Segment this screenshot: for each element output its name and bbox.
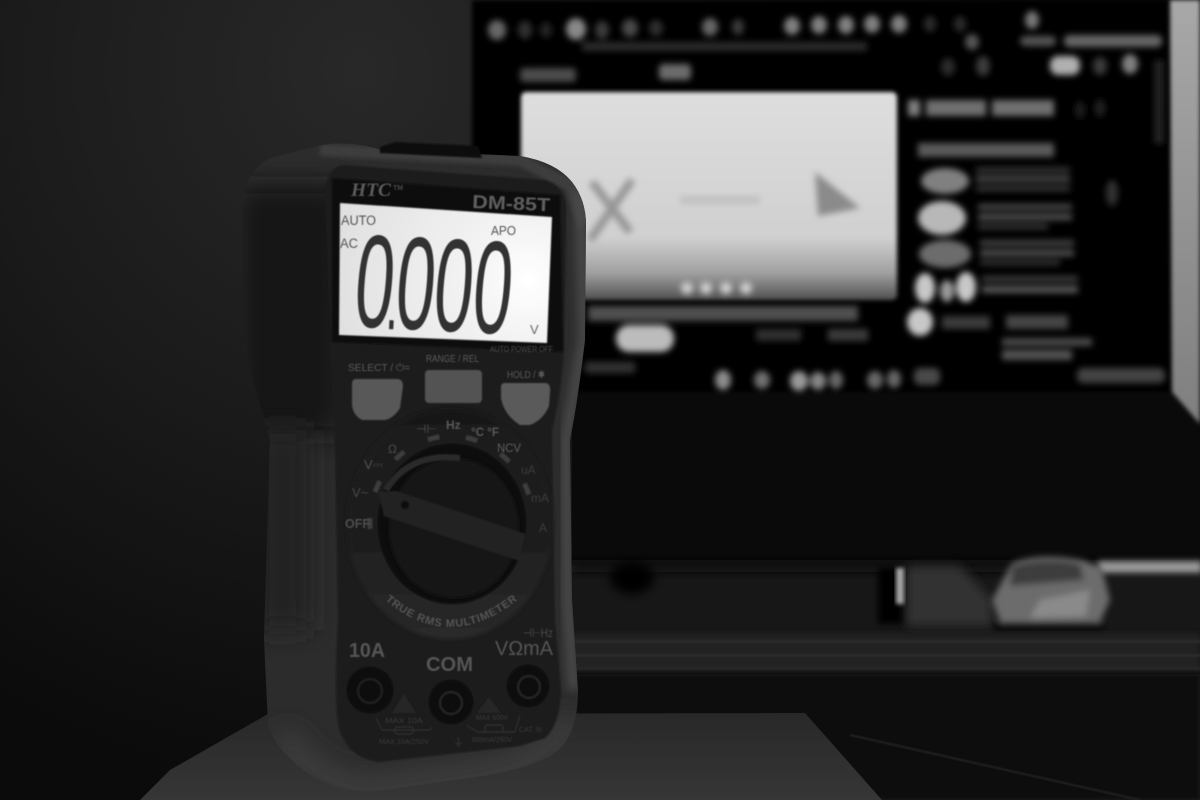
LCD screen: AC bbox=[340, 236, 358, 251]
gray box bbox=[906, 566, 992, 626]
LCD surround bbox=[332, 178, 563, 352]
dial function labels bbox=[345, 418, 549, 535]
LCD reading: 0 bbox=[429, 212, 480, 361]
dial function labels: uA bbox=[521, 463, 536, 477]
top notch bbox=[380, 142, 482, 158]
rotary dial bbox=[345, 418, 549, 638]
rubber boot with soft shading bbox=[243, 144, 586, 774]
logo: HTC bbox=[350, 180, 391, 201]
blurred laptop screen panel bbox=[521, 92, 897, 300]
multimeter bbox=[243, 142, 586, 774]
hold button bbox=[501, 383, 550, 425]
select button bbox=[352, 379, 403, 420]
model name: DM-85T bbox=[472, 192, 551, 215]
auto power off label: AUTO POWER OFF bbox=[490, 345, 553, 354]
dial function labels: V~ bbox=[352, 485, 369, 500]
front panel bbox=[325, 165, 566, 762]
laptop bezel bbox=[472, 0, 1172, 392]
fuse and safety markings: 600mA/250V bbox=[472, 737, 512, 744]
LCD reading: 0 bbox=[468, 214, 519, 363]
toy car bbox=[992, 557, 1110, 628]
jack: VΩmA bbox=[507, 665, 549, 707]
fuse and safety markings: CAT. III bbox=[519, 727, 542, 734]
blurred lower toolbar bbox=[585, 306, 1165, 391]
input jack labels: COM bbox=[426, 654, 473, 676]
light strip on the right bbox=[1170, 0, 1200, 424]
bright clip edge bbox=[896, 568, 904, 604]
paper sheet under the meter bbox=[140, 713, 882, 800]
LCD reading: . bbox=[386, 276, 398, 343]
dial function labels: °C °F bbox=[471, 425, 499, 439]
grooved mat lines bbox=[850, 735, 1140, 800]
laptop base and keyboard bbox=[572, 385, 1200, 565]
LCD screen: V bbox=[530, 322, 539, 337]
fuse and safety markings: MAX 600V bbox=[476, 715, 508, 722]
knob pointer bbox=[378, 491, 526, 561]
boot left dark side bbox=[243, 174, 334, 446]
desk clutter: clip and toy car bbox=[878, 557, 1200, 628]
cable bbox=[1098, 561, 1200, 573]
LCD reading: 0 bbox=[350, 208, 401, 357]
boot top rim highlight bbox=[320, 150, 584, 225]
jack: COM bbox=[429, 680, 473, 724]
dial function labels: Hz bbox=[446, 418, 461, 432]
dial knob bbox=[378, 444, 526, 604]
dial function labels: A bbox=[539, 521, 547, 535]
dial function labels: ⊣⊢ bbox=[416, 422, 437, 436]
dial function labels: mA bbox=[531, 491, 549, 505]
LCD mode labels: AUTO bbox=[341, 213, 376, 228]
laptop in the background bbox=[472, 0, 1200, 565]
fuse and safety markings: MAX 10A/250V bbox=[379, 739, 429, 746]
dial function labels: Ω bbox=[388, 442, 397, 456]
dial tick marks bbox=[367, 434, 532, 530]
desk surface bbox=[572, 560, 1200, 800]
blurred side list bbox=[907, 99, 1118, 360]
pointer dot bbox=[401, 501, 409, 509]
input jack labels: 10A bbox=[349, 640, 385, 662]
range button bbox=[425, 370, 482, 403]
LCD reading: 0 bbox=[391, 210, 442, 359]
logo: TM bbox=[393, 185, 403, 192]
dial function labels: OFF bbox=[345, 516, 370, 531]
dial outer ring bbox=[347, 409, 553, 639]
button labels: SELECT / ⏻= bbox=[348, 362, 410, 374]
jack: 10A bbox=[347, 667, 393, 713]
input jack labels: ⊣⊢Hz bbox=[523, 626, 553, 640]
button labels bbox=[348, 353, 545, 381]
fuse and safety markings: ⏚ bbox=[453, 736, 464, 749]
LCD reading bbox=[350, 208, 519, 363]
fuse and safety markings bbox=[376, 694, 542, 749]
blurred toolbar icons bbox=[488, 11, 1164, 144]
LCD screen: APO bbox=[491, 224, 516, 238]
input jack labels bbox=[349, 626, 554, 676]
knob highlight bbox=[386, 457, 460, 490]
boot bottom rim bbox=[280, 720, 576, 790]
true rms multimeter arc label: TRUE RMS MULTIMETER bbox=[387, 594, 517, 628]
boot right rim highlight bbox=[566, 190, 584, 690]
boot left lower dark area bbox=[265, 442, 308, 630]
fuse and safety markings: MAX 10A bbox=[385, 718, 423, 725]
dial function labels: NCV bbox=[497, 441, 521, 455]
dial function labels: V⎓ bbox=[364, 457, 383, 472]
black clip bbox=[878, 568, 906, 624]
button labels: HOLD / ✱ bbox=[507, 369, 545, 381]
button labels: RANGE / REL bbox=[426, 353, 479, 365]
LCD screen bbox=[339, 203, 552, 363]
input jack labels: VΩmA bbox=[495, 638, 554, 660]
